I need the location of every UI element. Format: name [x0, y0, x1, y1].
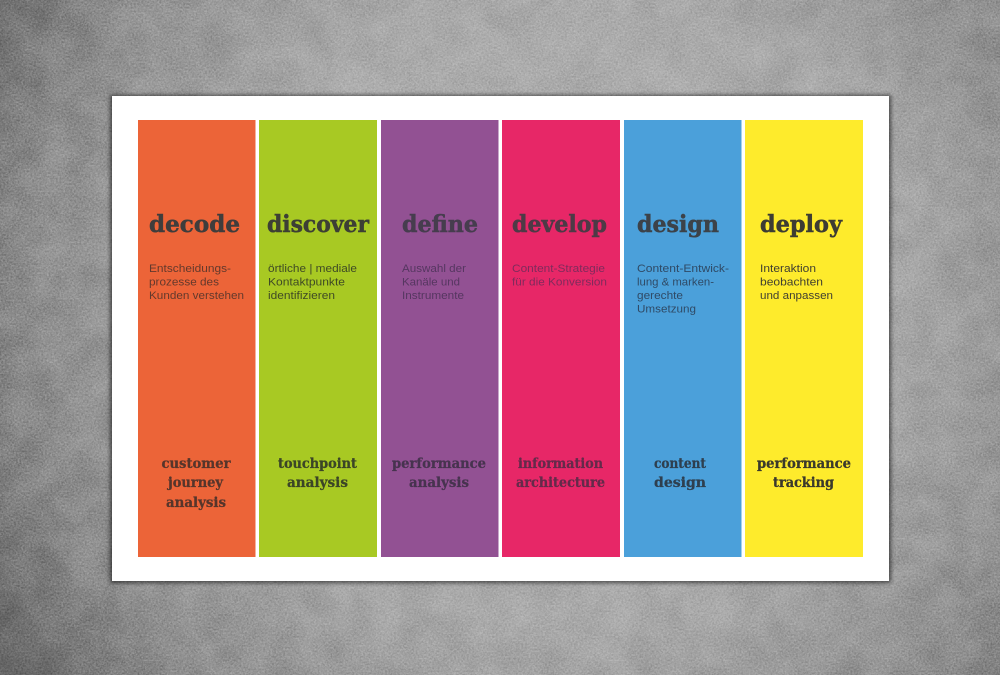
panel: discover	[259, 120, 377, 557]
description: design: lung & marken-	[637, 276, 714, 288]
description: design: Umsetzung	[637, 304, 696, 316]
label: performance analysis: performance	[392, 456, 486, 472]
description: define: Auswahl der	[402, 263, 466, 275]
description: define: Kanäle und	[402, 276, 460, 288]
label: performance tracking	[757, 456, 851, 491]
label: content design	[654, 456, 706, 491]
label: customer journey analysis: analysis	[166, 495, 226, 511]
description: discover: Kontaktpunkte	[268, 276, 345, 288]
description: define	[402, 263, 466, 302]
panel: deploy	[745, 120, 863, 557]
description: decode	[149, 263, 244, 302]
label: information architecture: architecture	[516, 475, 605, 491]
label: information architecture	[516, 456, 605, 491]
label: content design: design	[654, 475, 706, 491]
label: customer journey analysis	[162, 456, 231, 511]
description: discover	[268, 263, 357, 302]
label: information architecture: information	[518, 456, 603, 472]
label: customer journey analysis: journey	[166, 475, 224, 491]
white card	[112, 96, 889, 581]
heading: design: design	[637, 211, 719, 238]
description: decode: Entscheidungs-	[149, 263, 231, 275]
label: performance tracking: tracking	[773, 475, 834, 491]
label: customer journey analysis: customer	[162, 456, 231, 472]
panel: decode	[138, 120, 256, 557]
description: develop	[512, 263, 607, 288]
heading: develop: develop	[512, 211, 607, 238]
description: discover: identifizieren	[268, 290, 335, 302]
heading: deploy: deploy	[760, 211, 843, 238]
description: deploy: Interaktion	[760, 263, 816, 275]
card shadow	[110, 95, 891, 583]
description: develop: für die Konversion	[512, 276, 607, 288]
label: content design: content	[654, 456, 706, 472]
label: touchpoint analysis: touchpoint	[278, 456, 357, 472]
label: performance tracking: performance	[757, 456, 851, 472]
description: design: Content-Entwick-	[637, 263, 729, 275]
description: deploy	[760, 263, 833, 302]
panel: develop	[502, 120, 620, 557]
description: develop: Content-Strategie	[512, 263, 605, 275]
label: touchpoint analysis: analysis	[287, 475, 348, 491]
description: define: Instrumente	[402, 290, 464, 302]
description: design	[637, 263, 729, 316]
description: decode: prozesse des	[149, 276, 220, 288]
heading: define: define	[402, 211, 478, 238]
description: deploy: beobachten	[760, 276, 823, 288]
label: performance analysis	[392, 456, 486, 491]
label: touchpoint analysis	[278, 456, 357, 491]
panel: design	[624, 120, 742, 557]
heading: decode: decode	[149, 211, 240, 238]
label: performance analysis: analysis	[409, 475, 469, 491]
heading: discover: discover	[267, 211, 370, 238]
description: decode: Kunden verstehen	[149, 290, 244, 302]
description: deploy: und anpassen	[760, 290, 833, 302]
description: design: gerechte	[637, 290, 683, 302]
panel: define	[381, 120, 498, 557]
description: discover: örtliche | mediale	[268, 263, 357, 275]
